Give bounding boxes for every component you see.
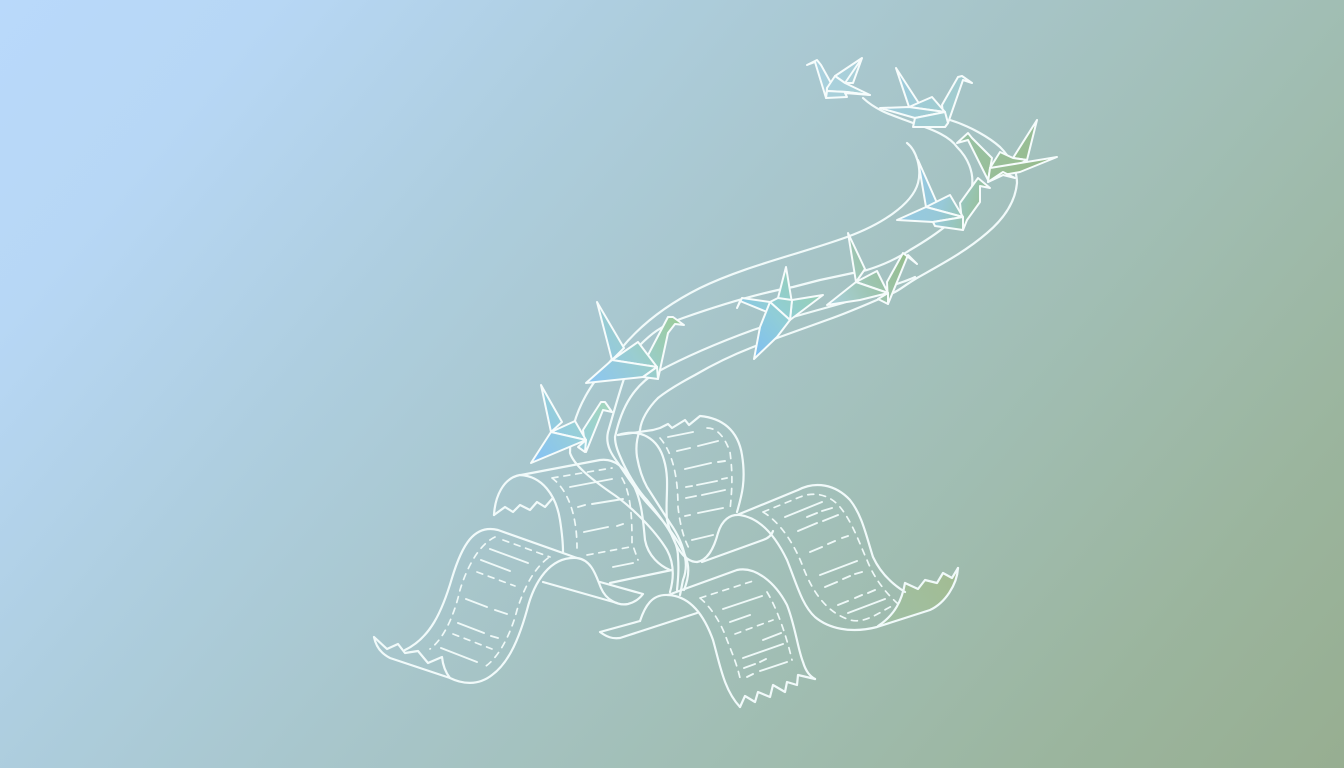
crane 2 bbox=[880, 68, 972, 127]
crane 3: green bbox=[957, 120, 1057, 182]
receipt: front center (over threads) bbox=[600, 569, 815, 707]
thread ribbons from receipts to cranes bbox=[570, 98, 1017, 595]
crane 6: center bbox=[737, 267, 823, 359]
receipt: right with green tail bbox=[697, 485, 958, 630]
crane 4 bbox=[897, 160, 990, 230]
crane 7 bbox=[586, 302, 684, 383]
crane 1: top bbox=[807, 58, 870, 98]
green tail of receipt bbox=[878, 568, 958, 626]
receipt: back right bbox=[618, 416, 744, 562]
crane 8 bbox=[531, 385, 612, 463]
crane 5 bbox=[827, 233, 917, 305]
receipt: front left bbox=[374, 529, 643, 683]
receipt: back left bbox=[494, 460, 672, 583]
